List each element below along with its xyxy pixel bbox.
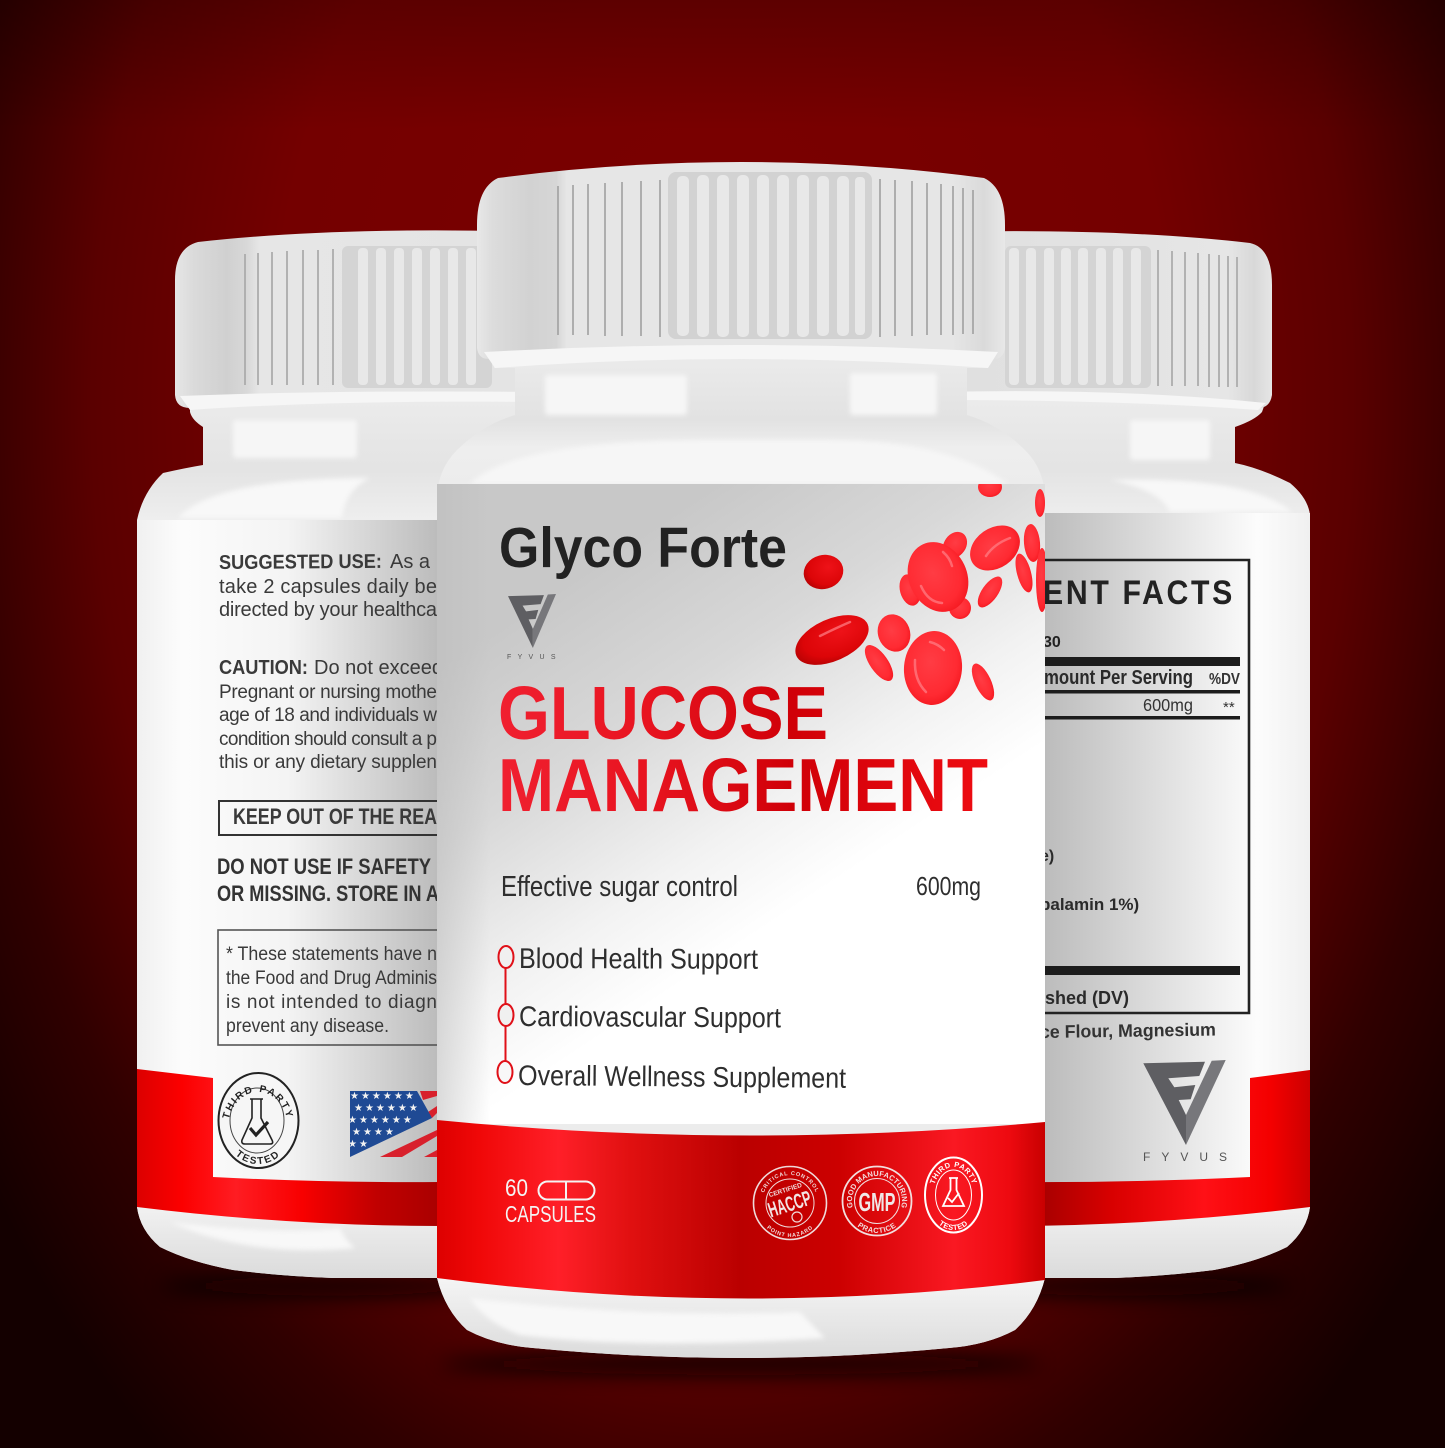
bottle body: left [137,395,545,1278]
text: suggested use [219,551,438,621]
notice box: keep out of reach [219,801,459,835]
badge: haccp: CRITICAL CONTROL [761,1171,818,1192]
label: right [1000,513,1310,1228]
badge: haccp [752,1166,828,1240]
benefit timeline markers [498,946,514,1083]
headline: MANAGEMENT [498,743,988,827]
badge: haccp: POINT HAZARD [766,1225,812,1237]
text: suggested use: directed by your healthca [219,599,438,621]
shoulder highlight: right [1110,480,1292,512]
text: do not use [217,854,439,906]
red band: front [437,1120,1045,1299]
supplement facts panel: palamin 1%) [1040,895,1139,914]
capsule count [505,1175,596,1227]
badge: gmp: GOOD MANUFACTURING [846,1170,908,1208]
disclaimer box: prevent any disease. [226,1016,389,1037]
text: do not use: DO NOT USE IF SAFETY [217,854,431,879]
text: caution: Pregnant or nursing mothe [219,682,437,703]
badge: gmp [842,1166,912,1236]
base [437,1278,1045,1358]
supplement facts panel: %DV [1209,671,1240,688]
base: left [137,1207,440,1278]
bottle: back right [940,231,1310,1278]
supplement facts panel: 600mg [1143,695,1193,715]
logo: fyvus small [507,594,562,661]
supplement facts panel: ished (DV) [1040,988,1129,1008]
benefits list: Blood Health Support [519,943,758,976]
notice box: keep out of reach: KEEP OUT OF THE REA [233,804,437,829]
label: front [437,484,1045,1124]
badge: gmp: PRACTICE [858,1222,896,1233]
disclaimer box [218,930,458,1045]
headline [498,671,988,827]
base highlight [470,1298,825,1343]
disclaimer box: the Food and Drug Adminis [226,968,437,989]
text: suggested use: take 2 capsules daily be [219,576,437,598]
tagline row [501,871,981,903]
supplement facts panel: ** [1223,699,1235,716]
badge: third party tested [924,1156,983,1234]
floor shadow: front bottle [441,1353,1041,1375]
bottle: front [437,162,1045,1358]
neck highlight: left [233,420,357,458]
neck highlight: right [1130,420,1210,460]
text: caution: this or any dietary supplen [219,752,437,773]
supplement facts panel [1000,560,1249,1013]
badge: haccp: CERTIFIED [768,1182,803,1199]
text: caution: age of 18 and individuals w [219,705,437,726]
badge: gmp: GMP [858,1187,896,1217]
label: left [137,520,440,1228]
disclaimer box: * These statements have n [226,944,437,965]
headline: GLUCOSE [498,671,828,755]
text: suggested use: SUGGESTED USE: [219,551,382,574]
text: do not use: OR MISSING. STORE IN A [217,881,439,906]
bottle: back left [137,230,515,1278]
bottle body: right [940,395,1310,1278]
neck highlights [545,373,937,415]
badge: third party tested, left [218,1072,300,1169]
supplement facts panel: e) [1040,848,1054,865]
logo: fyvus small: FYVUS [507,654,562,661]
bottle neck and body [437,345,1045,1358]
tagline row: 600mg [916,871,981,901]
icon: usa flag: ★★★★★★ [354,1103,420,1114]
text: other ingredients: ce Flour, Magnesium [1040,1020,1216,1042]
tagline row: Effective sugar control [501,871,738,903]
capsule count: 60 [505,1175,528,1202]
product name: Glyco Forte [499,516,787,580]
base: right [1000,1207,1310,1278]
text: caution: condition should consult a p [219,729,437,750]
shoulder highlight: left [178,478,370,518]
badge: third party tested: THIRD PARTY [930,1162,978,1183]
cap: front [477,162,1005,368]
cap: left [175,230,540,410]
benefits list: Overall Wellness Supplement [518,1060,846,1095]
icon: usa flag: ★★ [348,1139,370,1150]
disclaimer box: is not intended to diagn [226,992,437,1013]
icon: usa flag [348,1091,437,1157]
icon: usa flag: ★★★★★★ [348,1115,414,1126]
benefits list [518,943,846,1095]
badge: third party tested, left: TESTED [237,1149,278,1164]
icon: usa flag: ★★★★ [352,1127,396,1138]
cap: right [940,231,1272,410]
floor shadow: back bottles [160,1276,1290,1296]
text: caution: CAUTION: [219,657,308,679]
heading: supplement facts: ENT FACTS [1043,574,1235,612]
icon: usa flag: ★★★★★★ [350,1091,416,1102]
capsule count: CAPSULES [505,1201,596,1227]
red band: left [137,1069,440,1226]
illustration: red blood cells [788,477,1048,707]
icon: capsule [538,1182,594,1200]
supplement facts panel: 30 [1043,634,1061,651]
badge: haccp: HACCP [765,1187,814,1222]
supplement facts panel: mount Per Serving [1044,667,1193,689]
badge: third party tested: TESTED [940,1220,967,1230]
logo: fyvus large [1143,1060,1238,1164]
logo: fyvus large: FYVUS [1143,1150,1238,1164]
shoulder highlight [470,440,1008,484]
base highlight: left [170,1222,355,1250]
text: suggested use: As a [390,551,431,573]
text: caution [219,657,443,773]
badge: third party tested, left: THIRD PARTY [222,1085,294,1118]
text: caution: Do not exceed [314,657,443,679]
red band: right [1000,1070,1310,1226]
benefits list: Cardiovascular Support [519,1001,781,1034]
